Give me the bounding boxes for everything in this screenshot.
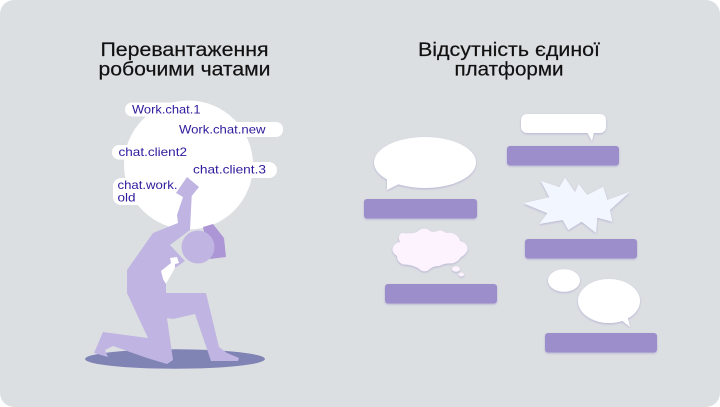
speech bubble: oval (374, 137, 476, 190)
bar 1 (364, 199, 477, 218)
chat label: Work.chat.1: Work.chat.1 (132, 102, 201, 116)
chat label: chat.client.3: chat.client.3 (193, 162, 266, 176)
chat label: chat.work.old: old (118, 190, 136, 204)
speech bubble: small oval (548, 269, 580, 292)
bar 3 (525, 239, 637, 258)
chat label: chat.client.3 (186, 162, 277, 178)
title: right: Відсутність єдиної (418, 40, 601, 61)
chat label: Work.chat.new: Work.chat.new (179, 122, 266, 136)
speech bubble: large oval (578, 279, 640, 327)
title: left: робочими чатами (98, 60, 270, 80)
head (182, 230, 214, 264)
chat label: Work.chat.new (172, 122, 283, 137)
chat label: chat.client2: chat.client2 (118, 145, 187, 159)
hair (203, 224, 226, 259)
bar 5 (545, 333, 657, 352)
thought bubble: cloud (392, 229, 468, 276)
bar 2 (507, 146, 619, 166)
ground shadow (85, 349, 265, 369)
title: left: Перевантаження (100, 40, 268, 61)
chat label: chat.work.old: chat.work. (118, 178, 178, 192)
title: right: платформи (454, 60, 564, 80)
title: left (98, 40, 270, 80)
bar 4 (385, 284, 497, 304)
white globe (124, 100, 253, 230)
chat label: chat.work.old (113, 178, 179, 205)
speech bubble: rounded rectangle (521, 114, 606, 141)
body (94, 177, 239, 364)
speech bubble: starburst (523, 178, 630, 233)
title: right (418, 40, 601, 80)
white gap at arm (161, 257, 179, 284)
illustration: figure carrying chats (85, 100, 283, 369)
